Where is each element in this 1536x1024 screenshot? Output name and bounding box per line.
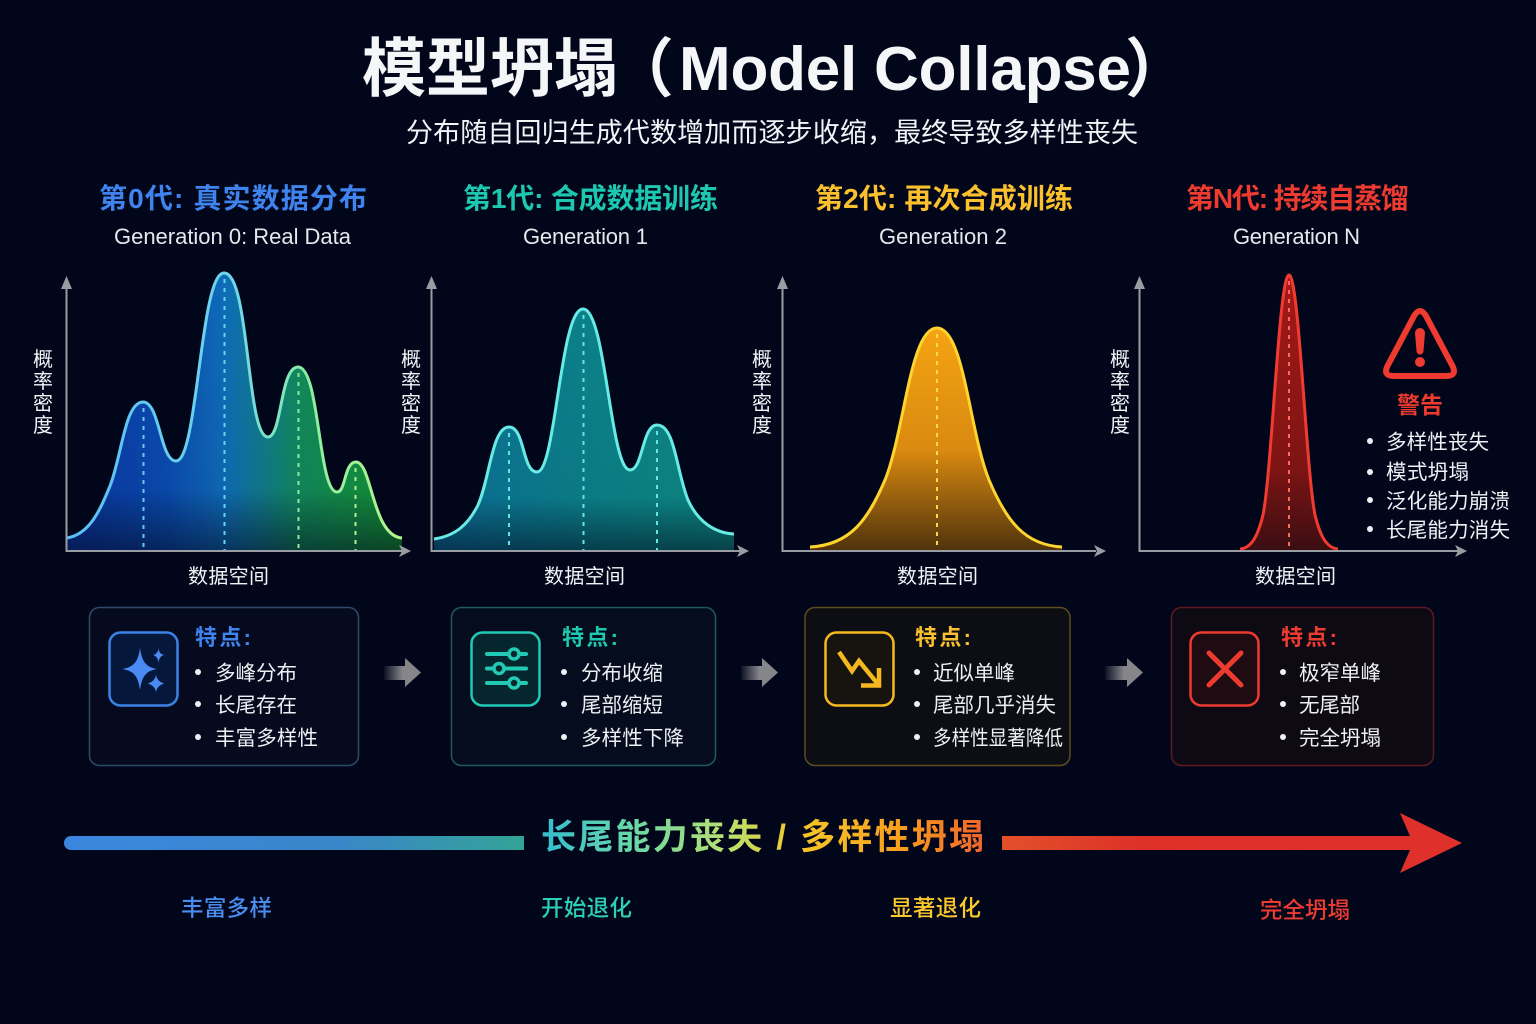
heading: generation 2 — [815, 183, 1073, 249]
warning list: 长尾能力消失 — [1386, 519, 1510, 542]
icon: warning triangle — [1386, 311, 1454, 376]
icon: falling trend arrow — [826, 632, 894, 706]
chart: generation N distribution: 率 — [1110, 370, 1130, 393]
heading: generation 1: 第1代: 合成数据训练 — [463, 183, 718, 214]
heading: generation N — [1186, 183, 1409, 249]
stage label: full collapse: 完全坍塌 — [1260, 898, 1350, 923]
chart: generation 0 distribution: 率 — [33, 370, 53, 393]
title: 模型坍塌 — [362, 33, 618, 105]
title — [362, 33, 1189, 105]
progress heading: 长尾能力丧失 / 多样性坍塌 — [541, 818, 984, 857]
chart: generation 0 distribution — [33, 273, 411, 588]
heading: generation N: Generation N — [1233, 224, 1360, 249]
panel: generation N traits — [1172, 608, 1434, 766]
arrow: step 2 — [741, 658, 778, 687]
warning list: 模式坍塌 — [1386, 461, 1469, 484]
panel: generation N traits: 极窄单峰 — [1299, 662, 1381, 685]
heading: generation 1: Generation 1 — [523, 224, 648, 249]
chart: generation 2 distribution: 度 — [752, 414, 772, 437]
panel: generation N traits: 特点: — [1281, 625, 1337, 650]
chart: generation 2 distribution: 概 — [752, 349, 772, 371]
stage label: marked degradation: 显著退化 — [890, 896, 981, 921]
heading: generation 0: Generation 0: Real Data — [114, 224, 352, 249]
icon: sparkles — [110, 632, 178, 706]
chart: generation N distribution: 度 — [1110, 414, 1130, 437]
heading: generation 2: 第2代: 再次合成训练 — [815, 183, 1073, 214]
panel: generation 1 traits — [452, 608, 716, 766]
panel: generation 1 traits: 尾部缩短 — [581, 694, 663, 717]
panel: generation N traits: 完全坍塌 — [1299, 727, 1381, 750]
panel: generation 2 traits: 特点: — [915, 625, 971, 650]
warning list: 泛化能力崩溃 — [1386, 490, 1510, 513]
chart: generation N distribution: 数据空间 — [1255, 565, 1336, 588]
chart: generation N distribution — [1110, 275, 1467, 588]
chart: generation 1 distribution: 率 — [401, 370, 421, 393]
chart: generation 0 distribution: 数据空间 — [188, 565, 269, 588]
panel: generation 1 traits: 特点: — [562, 625, 618, 650]
panel: generation 2 traits — [805, 608, 1070, 766]
chart: generation N distribution: 密 — [1110, 392, 1130, 415]
chart: generation 0 distribution: 度 — [33, 414, 53, 437]
stage label: rich diversity: 丰富多样 — [181, 896, 272, 921]
arrow: step 3 — [1105, 658, 1143, 687]
chart: generation 2 distribution: 率 — [752, 370, 772, 393]
heading: generation 2: Generation 2 — [879, 224, 1007, 249]
title: ） — [1125, 33, 1189, 105]
heading: generation 1 — [463, 183, 718, 249]
chart: generation 1 distribution — [401, 276, 749, 588]
subtitle: 分布随自回归生成代数增加而逐步收缩，最终导致多样性丧失 — [406, 118, 1138, 148]
title: （ — [610, 33, 674, 105]
icon: sliders — [472, 632, 540, 706]
panel: generation 1 traits: 多样性下降 — [581, 727, 684, 750]
chart: generation 2 distribution: 数据空间 — [897, 565, 978, 588]
warning list — [1367, 431, 1510, 542]
chart: generation 1 distribution: 数据空间 — [544, 565, 625, 588]
chart: generation 2 distribution — [752, 276, 1106, 588]
panel: generation 2 traits: 尾部几乎消失 — [933, 694, 1056, 717]
warning label: 警告 — [1397, 392, 1443, 418]
panel: generation N traits: 无尾部 — [1299, 694, 1360, 717]
heading: generation N: 第N代: 持续自蒸馏 — [1186, 183, 1409, 214]
heading: generation 0 — [99, 183, 367, 249]
arrow: step 1 — [384, 658, 421, 687]
chart: generation N distribution: 概 — [1110, 349, 1130, 371]
icon: cross — [1190, 632, 1258, 706]
title: Model Collapse — [679, 35, 1131, 104]
heading: generation 0: 第0代: 真实数据分布 — [99, 183, 367, 214]
panel: generation 2 traits: 近似单峰 — [933, 662, 1015, 685]
chart: generation 1 distribution: 度 — [401, 414, 421, 437]
panel: generation 0 traits: 丰富多样性 — [215, 727, 318, 750]
panel: generation 0 traits: 特点: — [195, 625, 251, 650]
stage label: degradation begins: 开始退化 — [541, 896, 632, 921]
panel: generation 0 traits: 多峰分布 — [215, 662, 297, 685]
panel: generation 2 traits: 多样性显著降低 — [933, 727, 1063, 750]
chart: generation 0 distribution: 密 — [33, 392, 53, 415]
progress bar: left segment — [64, 836, 524, 850]
chart: generation 1 distribution: 概 — [401, 349, 421, 371]
panel: generation 1 traits: 分布收缩 — [581, 662, 663, 685]
chart: generation 2 distribution: 密 — [752, 392, 772, 415]
chart: generation 0 distribution: 概 — [33, 349, 53, 371]
chart: generation 1 distribution: 密 — [401, 392, 421, 415]
panel: generation 0 traits: 长尾存在 — [215, 694, 297, 717]
panel: generation 0 traits — [90, 608, 358, 766]
warning list: 多样性丧失 — [1386, 431, 1489, 454]
progress arrow: right segment — [1002, 813, 1462, 873]
